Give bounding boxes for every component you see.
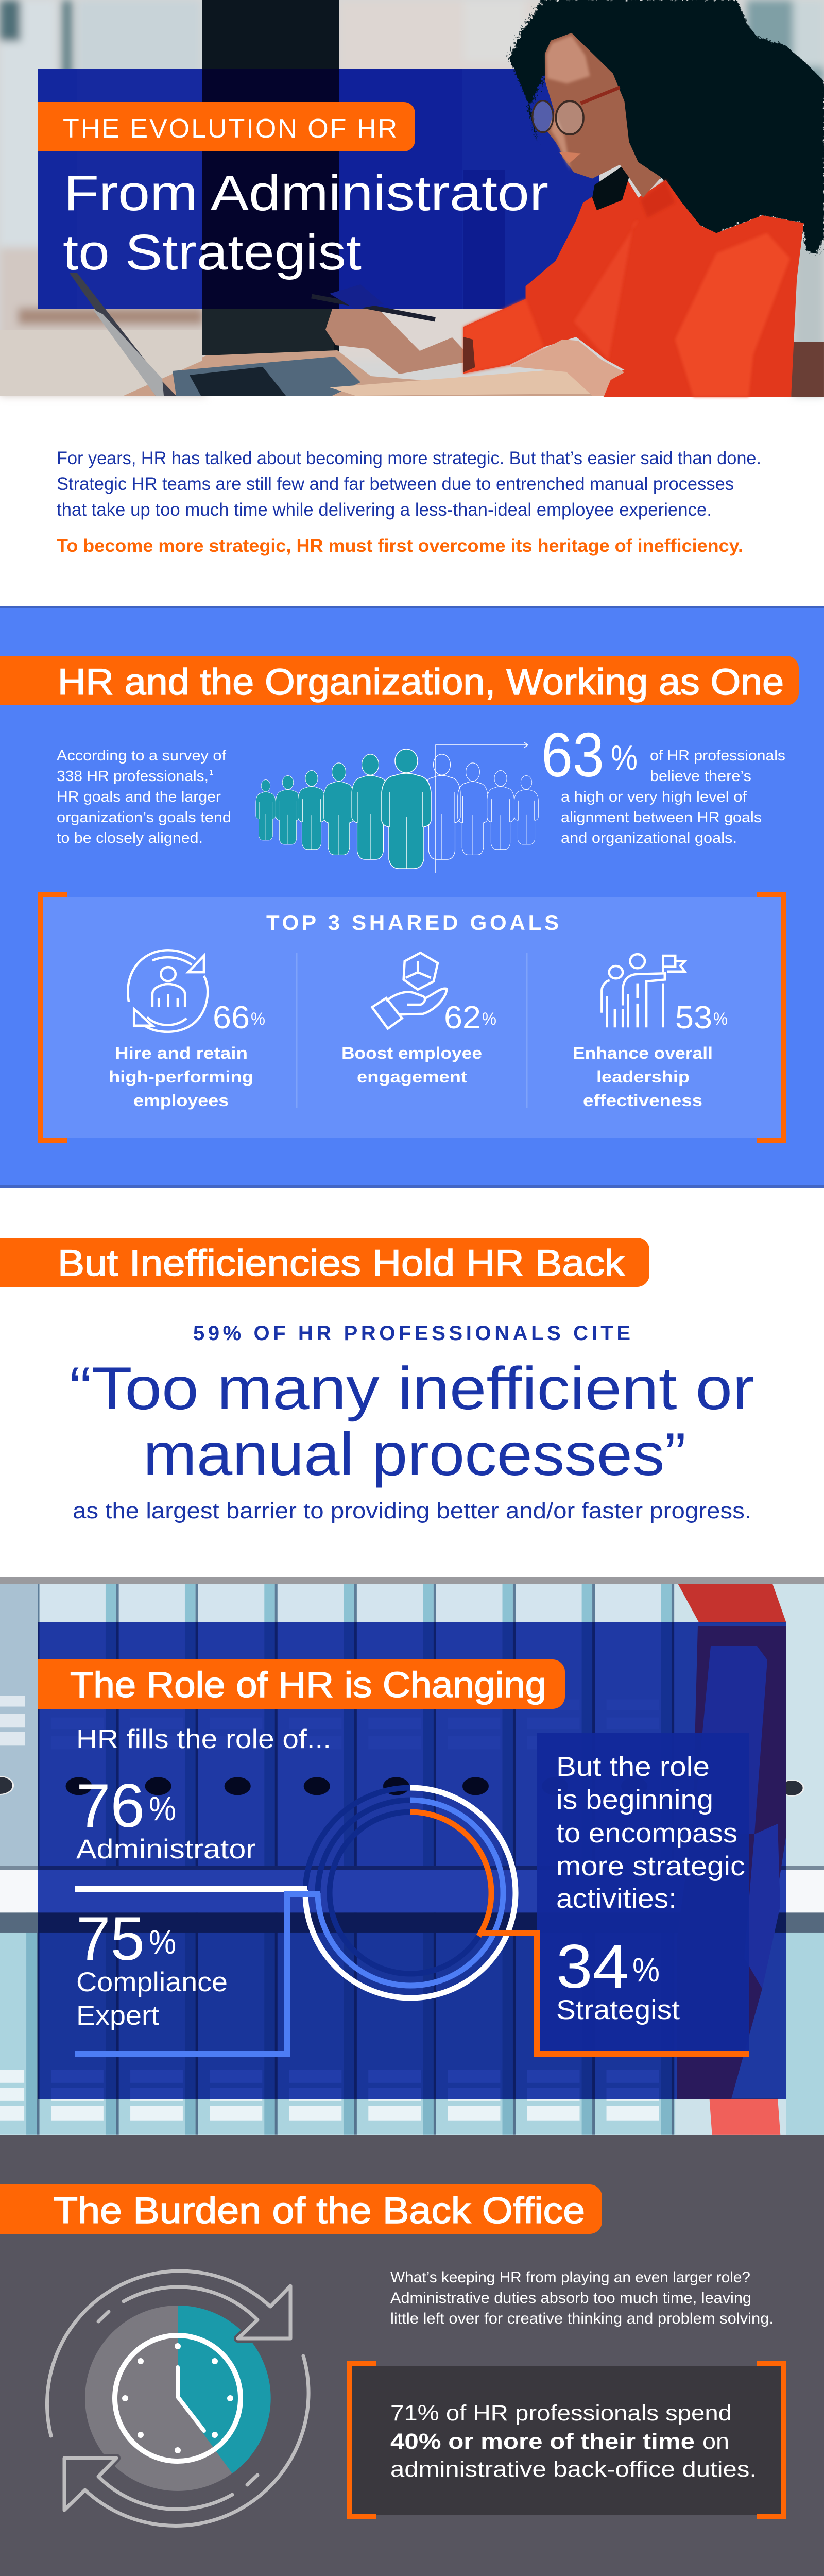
strategist stat: Strategist	[556, 1995, 680, 2025]
rotating arrows	[47, 2271, 308, 2526]
back office text: little left over for creative thinking and problem solving.	[390, 2310, 774, 2327]
strategist text: activities:	[556, 1884, 677, 1914]
pull quote: manual processes”	[143, 1420, 686, 1488]
compliance stat	[76, 1904, 228, 2031]
survey text: HR goals and the larger	[57, 789, 221, 805]
66 percent	[213, 1000, 265, 1036]
clock graphic	[47, 2271, 308, 2526]
survey text: 338 HR professionals,	[57, 768, 209, 785]
callout text: 40% or more of their time	[390, 2429, 695, 2454]
panel: burden of the back office	[0, 2135, 824, 2576]
compliance stat: Compliance	[76, 1967, 228, 1997]
66 percent: 66	[213, 1000, 250, 1036]
callout text: on	[702, 2429, 729, 2454]
53 percent: %	[713, 1009, 728, 1029]
goal 2	[341, 953, 496, 1086]
goal label: Enhance overall	[573, 1044, 713, 1062]
laptop	[70, 273, 592, 396]
62 percent: %	[482, 1009, 496, 1029]
section heading band	[0, 2184, 602, 2234]
goal label	[109, 1044, 253, 1110]
callout text: administrative back-office duties.	[390, 2457, 757, 2482]
section heading band: The Role of HR is Changing	[70, 1665, 546, 1705]
survey text: to be closely aligned.	[57, 830, 203, 846]
people graphic	[256, 749, 539, 869]
intro text: that take up too much time while delivering a less-than-ideal employee experience.	[57, 500, 712, 520]
section heading band: HR and the Organization, Working as One	[58, 662, 784, 703]
dark binder silhouette	[677, 1626, 786, 2099]
icon: leader with flag	[602, 954, 685, 1027]
63 percent description: of HR professionals	[650, 748, 785, 764]
administrator line	[75, 1886, 307, 1892]
strategist stat	[556, 1932, 680, 2025]
goal label: effectiveness	[583, 1091, 702, 1110]
survey text	[57, 748, 231, 846]
eyebrow tab	[38, 102, 415, 151]
63 percent stat: %	[611, 738, 638, 777]
main title: From Administrator	[64, 165, 548, 221]
section heading band: The Burden of the Back Office	[54, 2191, 585, 2231]
goal label: employees	[133, 1091, 229, 1110]
survey text: According to a survey of	[57, 748, 227, 764]
strategist line	[478, 1933, 749, 2054]
goal label	[573, 1044, 713, 1110]
compliance stat: 75	[76, 1904, 145, 1973]
hero photo background	[0, 0, 824, 396]
callout text	[390, 2401, 757, 2482]
orange brackets	[40, 894, 784, 1141]
compliance stat: %	[149, 1923, 176, 1961]
strategist text: is beginning	[556, 1785, 713, 1815]
back office text: Administrative duties absorb too much time, leaving	[390, 2290, 751, 2307]
intro text: Strategic HR teams are still few and far between due to entrenched manual processes	[57, 474, 734, 494]
pull quote	[70, 1354, 754, 1488]
callout text: 71% of HR professionals spend	[390, 2401, 732, 2426]
63 percent description: believe there’s	[650, 768, 751, 785]
pull quote: “Too many inefficient or	[70, 1354, 754, 1422]
administrator stat: %	[149, 1789, 176, 1827]
63 percent description: and organizational goals.	[561, 830, 737, 846]
right strategist panel	[537, 1733, 749, 2054]
compliance line	[75, 1894, 320, 2054]
table	[124, 350, 618, 396]
goal label: leadership	[596, 1067, 690, 1086]
section heading band: But Inefficiencies Hold HR Back	[58, 1243, 625, 1284]
66 percent: %	[251, 1009, 265, 1029]
eyebrow text: THE EVOLUTION OF HR	[63, 114, 397, 144]
panel: inefficiencies	[0, 1238, 754, 1523]
administrator stat: Administrator	[76, 1834, 256, 1865]
back office text	[390, 2269, 774, 2327]
goal label: engagement	[357, 1067, 467, 1086]
binders photo	[0, 1577, 824, 2135]
icon: rotating person	[128, 950, 208, 1032]
63 percent description: alignment between HR goals	[561, 809, 762, 826]
pillar	[202, 0, 339, 355]
stat lead-in: 59% OF HR PROFESSIONALS CITE	[193, 1322, 630, 1345]
woman	[464, 0, 824, 397]
63 percent description	[561, 748, 785, 846]
section heading band	[0, 1238, 649, 1287]
63 percent stat: 63	[541, 720, 604, 790]
section heading band	[38, 1659, 565, 1709]
strategist text: to encompass	[556, 1818, 737, 1849]
goal 1	[109, 950, 265, 1110]
compliance stat: Expert	[76, 2001, 159, 2031]
goal label: high-performing	[109, 1067, 253, 1086]
goals heading: TOP 3 SHARED GOALS	[266, 910, 559, 935]
63 percent description: a high or very high level of	[561, 789, 747, 805]
goal label: Boost employee	[341, 1044, 482, 1062]
goal label	[341, 1044, 482, 1086]
panel: the role of HR	[0, 1577, 824, 2135]
main title: to Strategist	[63, 224, 362, 280]
strategist text: But the role	[556, 1752, 710, 1782]
blue overlay	[38, 1622, 786, 2099]
strategist text: more strategic	[556, 1851, 745, 1882]
administrator stat	[76, 1771, 256, 1865]
strategist text	[556, 1752, 745, 1914]
53 percent: 53	[675, 1000, 712, 1036]
role lead-in: HR fills the role of...	[76, 1724, 331, 1754]
strategist stat: %	[632, 1951, 660, 1989]
intro text: For years, HR has talked about becoming more strategic. But that’s easier said than done.	[57, 448, 761, 468]
quote follow-up: as the largest barrier to providing better and/or faster progress.	[73, 1498, 751, 1523]
blue overlay	[38, 69, 599, 309]
main title	[63, 165, 548, 280]
pointer arrow	[436, 742, 528, 873]
62 percent	[444, 1000, 496, 1036]
62 percent: 62	[444, 1000, 481, 1036]
strategist stat: 34	[556, 1932, 629, 2001]
icon: hand holding hexagon	[372, 953, 447, 1028]
survey text: organization’s goals tend	[57, 809, 231, 826]
administrator stat: 76	[76, 1771, 145, 1840]
radial chart	[305, 1788, 516, 1998]
dividers	[297, 953, 527, 1108]
back office text: What’s keeping HR from playing an even larger role?	[390, 2269, 750, 2286]
53 percent	[675, 1000, 728, 1036]
intro callout: To become more strategic, HR must first overcome its heritage of inefficiency.	[57, 536, 743, 556]
panel: top 3 shared goals	[40, 894, 784, 1141]
clock face	[115, 2335, 241, 2461]
goal label: Hire and retain	[115, 1044, 248, 1062]
panel: HR and the organization	[0, 606, 824, 1188]
goal 3	[573, 954, 728, 1110]
woman's hand and pen	[312, 284, 621, 396]
survey text: 1	[209, 768, 213, 777]
hero panel	[0, 0, 824, 397]
callout: 71 percent	[349, 2364, 784, 2517]
intro text	[57, 448, 761, 556]
